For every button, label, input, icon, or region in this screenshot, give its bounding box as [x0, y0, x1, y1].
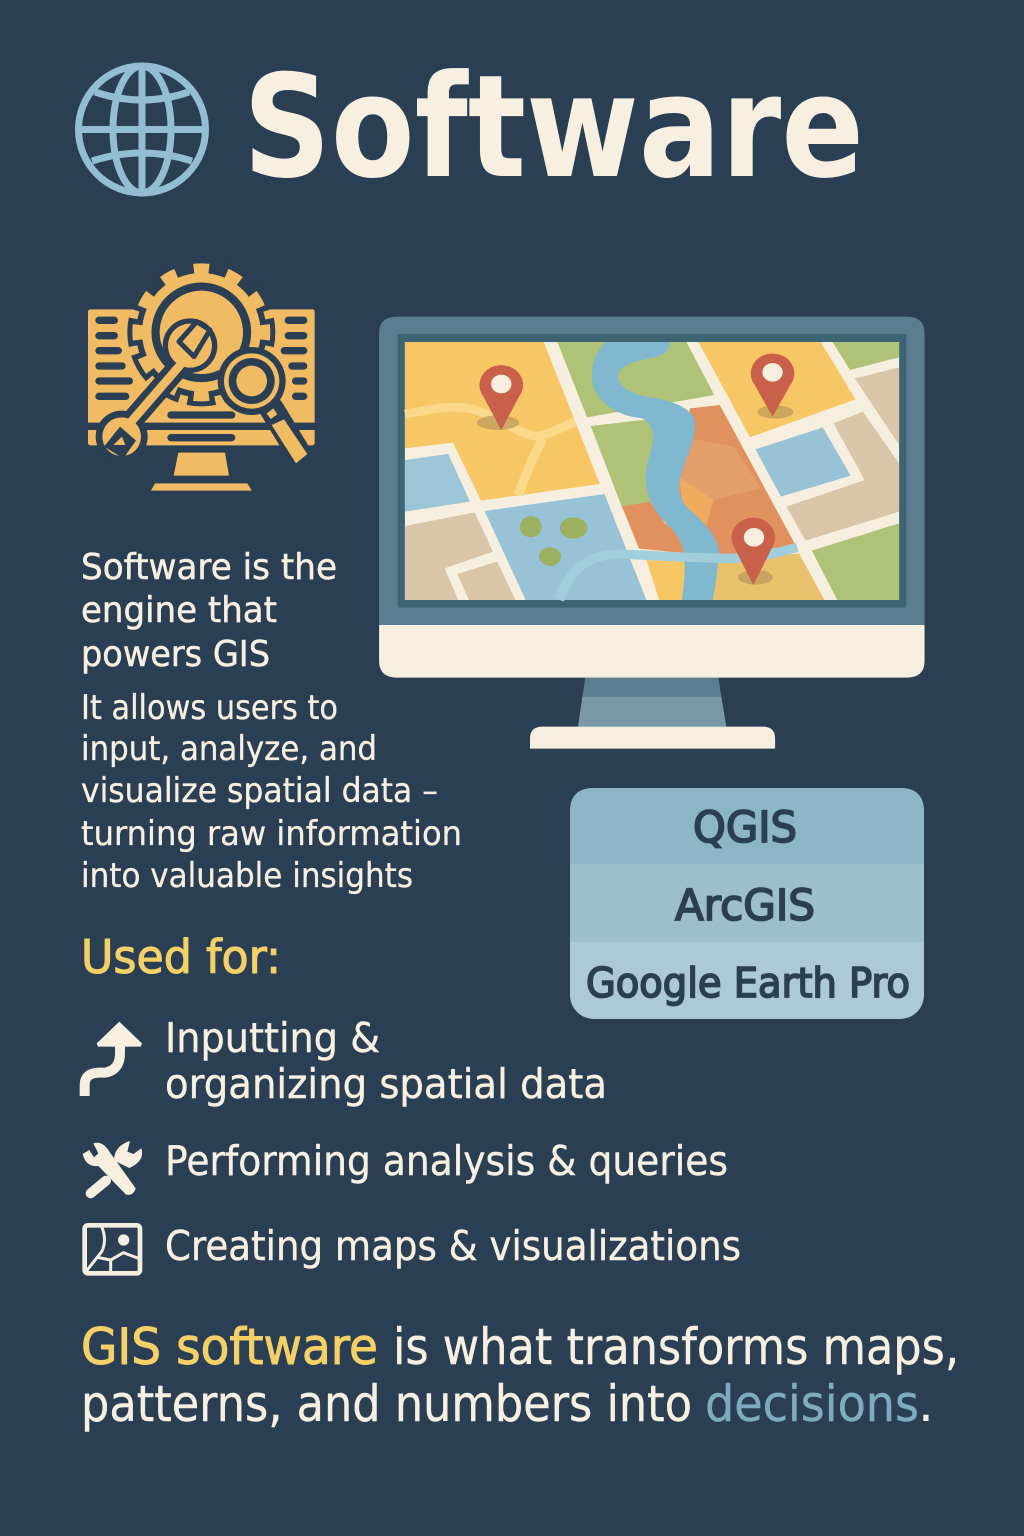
list item: analysis: Performing analysis & queries — [165, 1137, 728, 1185]
intro paragraph: into valuable insights — [81, 856, 413, 896]
icon: globe — [78, 66, 206, 193]
heading: used for: Used for: — [81, 930, 281, 984]
list item: analysis — [83, 1137, 728, 1195]
icon: map frame — [85, 1225, 140, 1273]
closing statement: GIS software — [81, 1318, 378, 1376]
intro heading — [81, 547, 337, 675]
illustration: desktop monitor with map — [379, 317, 925, 749]
list item: maps: Creating maps & visualizations — [165, 1222, 741, 1270]
intro heading: engine that — [81, 590, 277, 631]
icon: arrow — [85, 1022, 142, 1096]
list item: inputting: Inputting & — [165, 1014, 380, 1062]
map pin 3 — [731, 518, 775, 585]
label: ArcGIS: ArcGIS — [675, 881, 815, 931]
map pin 2 — [751, 353, 794, 419]
icon: gear, wrench and magnifier on monitor — [88, 264, 315, 491]
intro paragraph — [81, 688, 462, 896]
intro paragraph: visualize spatial data – — [81, 771, 438, 811]
title: Software — [243, 45, 864, 210]
intro paragraph: input, analyze, and — [81, 729, 377, 769]
map pin 1 — [477, 365, 523, 430]
closing statement: is what transforms maps, — [393, 1318, 959, 1376]
intro heading: Software is the — [81, 547, 337, 588]
map screen — [405, 342, 899, 600]
closing statement — [81, 1318, 959, 1433]
label: Google Earth Pro: Google Earth Pro — [586, 959, 910, 1007]
list item: inputting — [85, 1014, 607, 1108]
list item: inputting: organizing spatial data — [165, 1060, 607, 1108]
monitor stand — [530, 678, 775, 749]
intro heading: powers GIS — [81, 634, 270, 675]
closing statement: decisions — [705, 1375, 919, 1433]
panel: GIS software list — [570, 788, 924, 1019]
intro paragraph: It allows users to — [81, 688, 338, 728]
monitor bezel — [379, 317, 925, 678]
icon: crossed tools — [83, 1141, 142, 1195]
label: QGIS: QGIS — [693, 803, 797, 853]
closing statement: patterns, and numbers into — [81, 1375, 692, 1433]
intro paragraph: turning raw information — [81, 814, 462, 854]
closing statement: . — [918, 1375, 934, 1433]
